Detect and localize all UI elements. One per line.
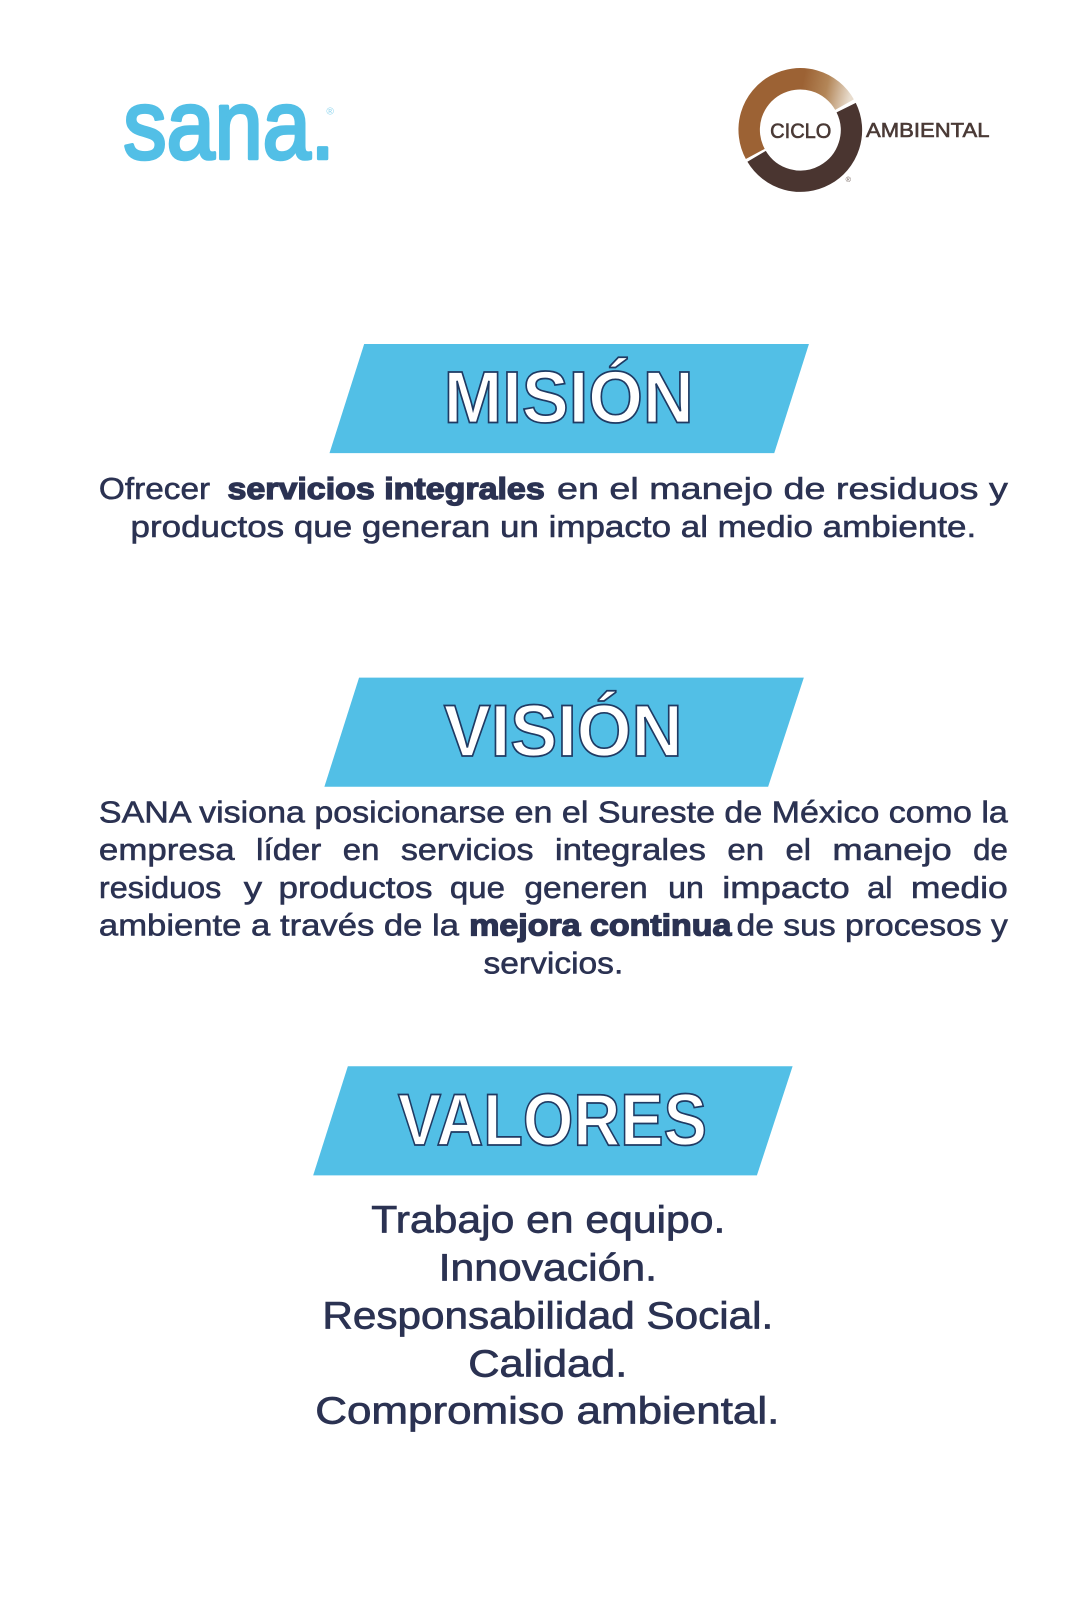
logo: ciclo ambiental: ® <box>846 176 852 184</box>
logo: ciclo ambiental <box>749 79 989 184</box>
text: misión: Ofrecer <box>99 472 210 506</box>
text: misión: en el manejo de residuos y <box>557 472 1009 506</box>
text: visión: ambiente a través de la <box>99 909 460 943</box>
text: visión: que <box>450 871 505 905</box>
text: visión: productos <box>278 871 433 905</box>
text: visión <box>99 795 1009 980</box>
text: visión: impacto <box>722 871 850 905</box>
list: valores: Calidad. <box>468 1342 627 1384</box>
text: visión: manejo <box>832 833 952 867</box>
text: visión: integrales <box>555 833 706 867</box>
list: valores: Innovación. <box>439 1246 657 1288</box>
text: visión: en <box>343 833 379 867</box>
logo: ciclo ambiental: AMBIENTAL <box>866 120 989 142</box>
banner: visión: VISIÓN <box>444 690 682 772</box>
banner: misión <box>329 344 809 453</box>
text: visión: SANA visiona posicionarse en el Sureste de México como la <box>99 795 1009 829</box>
text: visión: servicios <box>401 833 534 867</box>
list: valores: Compromiso ambiental. <box>315 1389 779 1431</box>
logo: ciclo ambiental: CICLO <box>770 119 831 143</box>
banner: valores: VALORES <box>398 1079 707 1161</box>
text: visión: residuos <box>99 871 221 905</box>
text: misión <box>99 472 1009 544</box>
banner: visión <box>324 678 804 787</box>
text: visión: de sus procesos y <box>737 909 1009 943</box>
text: visión: en <box>727 833 764 867</box>
logo: sana: sana. <box>123 69 335 179</box>
text: visión: un <box>668 871 704 905</box>
text: visión: el <box>785 833 811 867</box>
banner: valores <box>313 1066 793 1175</box>
text: visión: al <box>867 871 893 905</box>
text: visión: servicios. <box>484 946 623 980</box>
text: misión: productos que generan un impacto al medio ambiente. <box>131 510 976 544</box>
text: misión: servicios integrales <box>227 472 545 506</box>
text: visión: generen <box>524 871 648 905</box>
text: visión: y <box>244 871 263 905</box>
list: valores: Responsabilidad Social. <box>322 1294 773 1336</box>
text: visión: medio <box>911 871 1008 905</box>
banner: misión: MISIÓN <box>444 357 694 439</box>
list: valores: Trabajo en equipo. <box>371 1199 725 1241</box>
text: visión: empresa <box>99 833 236 867</box>
list: valores <box>315 1199 779 1431</box>
text: visión: mejora continua <box>469 909 732 943</box>
logo: sana: ® <box>326 106 334 117</box>
text: visión: de <box>973 833 1008 867</box>
text: visión: líder <box>256 833 321 867</box>
